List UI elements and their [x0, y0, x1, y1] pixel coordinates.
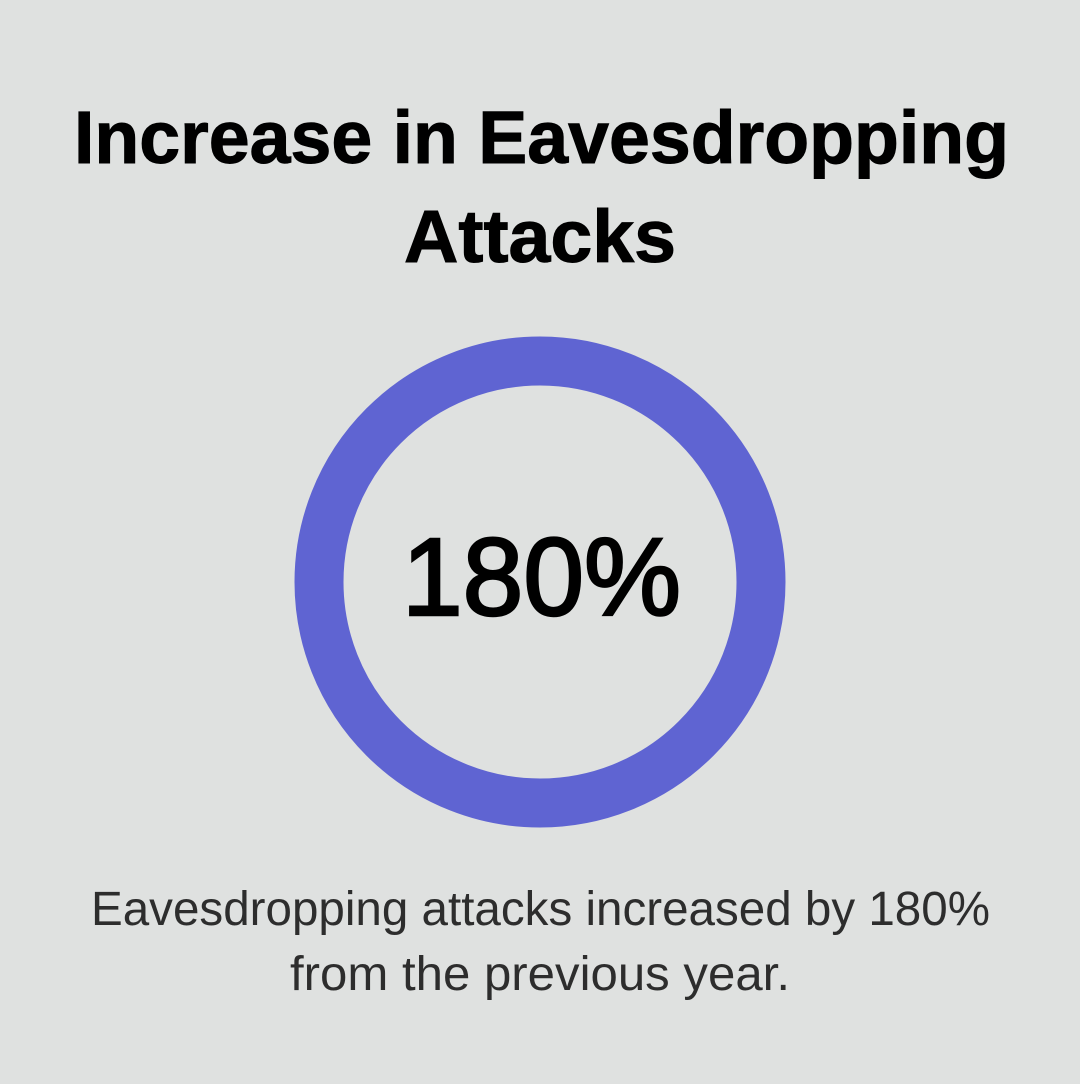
title	[74, 96, 1009, 278]
caption: Eavesdropping attacks increased by 180%	[91, 883, 990, 936]
title: Increase in Eavesdropping	[74, 96, 1009, 179]
ring chart: 180%	[319, 361, 761, 803]
caption	[91, 883, 990, 1001]
title: Attacks	[404, 195, 676, 278]
donut ring	[319, 361, 761, 803]
caption: from the previous year.	[290, 948, 790, 1001]
ring value label: 180%	[402, 516, 681, 639]
